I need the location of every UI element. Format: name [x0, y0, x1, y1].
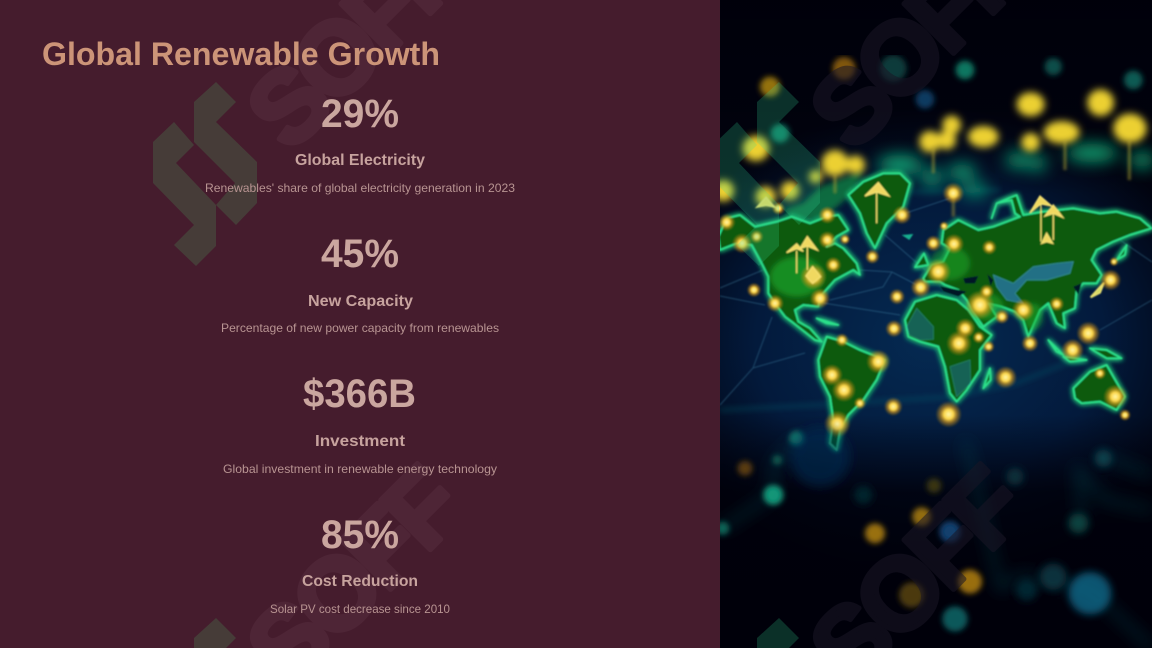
panel: left maroon background [0, 0, 720, 648]
Kamchatka [1117, 245, 1127, 260]
thin network lines [720, 195, 1152, 405]
stat: investment [223, 372, 497, 476]
stat: global electricity: 29% [321, 92, 399, 136]
Sumatra [1048, 340, 1063, 355]
New Guinea [1090, 348, 1122, 358]
light stems [835, 140, 1129, 217]
glowing city lights [718, 183, 1131, 437]
dim background lights [760, 55, 1143, 143]
Eurasia [923, 195, 1152, 337]
watermark: map panel logos and SOFF text [720, 0, 1014, 648]
blue inland region [993, 262, 1073, 303]
Africa [905, 295, 992, 402]
stat: global electricity [205, 92, 515, 195]
stat: investment: Global investment in renewable energy technology [223, 462, 497, 476]
UK [915, 253, 928, 267]
blurred northern land [878, 144, 1152, 196]
watermark logo bottom [194, 618, 236, 648]
Japan [1091, 283, 1104, 297]
Canadian arctic blur [783, 170, 863, 220]
Australia [1073, 365, 1125, 410]
bright Europe and Middle East land [930, 247, 1043, 330]
blurred yellow lights [713, 55, 1147, 437]
stat: new capacity: Percentage of new power capacity from renewables [221, 321, 499, 335]
stat: investment: Investment [315, 433, 406, 450]
stat: new capacity: 45% [321, 232, 399, 276]
stat: new capacity: New Capacity [308, 293, 413, 310]
Java [1063, 357, 1087, 362]
stat: cost reduction: Cost Reduction [302, 573, 418, 590]
watermark logo top on map [716, 82, 820, 266]
blue African borders [907, 308, 971, 397]
watermark logo bottom on map [716, 618, 820, 648]
bright US interior [770, 257, 823, 297]
North America [718, 215, 860, 342]
South America [818, 337, 885, 450]
stat: cost reduction [270, 513, 450, 616]
stat: new capacity [221, 232, 499, 335]
image: glowing world map [713, 0, 1152, 648]
Greenland [848, 173, 910, 248]
lights in the lower dark area [716, 427, 1112, 632]
watermark logo top [153, 82, 257, 266]
stat: cost reduction: Solar PV cost decrease since 2010 [270, 602, 450, 616]
Americas [718, 173, 913, 450]
blurred lines below the map [720, 437, 1152, 648]
thick dim ocean lines [720, 190, 1067, 410]
inland seas [940, 274, 1082, 297]
stat: cost reduction: 85% [321, 513, 399, 557]
stat: global electricity: Global Electricity [295, 152, 425, 169]
title: Global Renewable Growth [42, 36, 440, 72]
stat: investment: $366B [303, 372, 416, 416]
Eurasia Africa Australia [905, 195, 1152, 410]
icon: wind turbines [757, 183, 1063, 283]
Madagascar [983, 368, 991, 388]
stat: global electricity: Renewables' share of global electricity generation in 2023 [205, 181, 515, 195]
Iceland [902, 234, 913, 240]
watermark: left panel logos and SOFF text [153, 0, 483, 648]
Caribbean islands [817, 318, 838, 325]
